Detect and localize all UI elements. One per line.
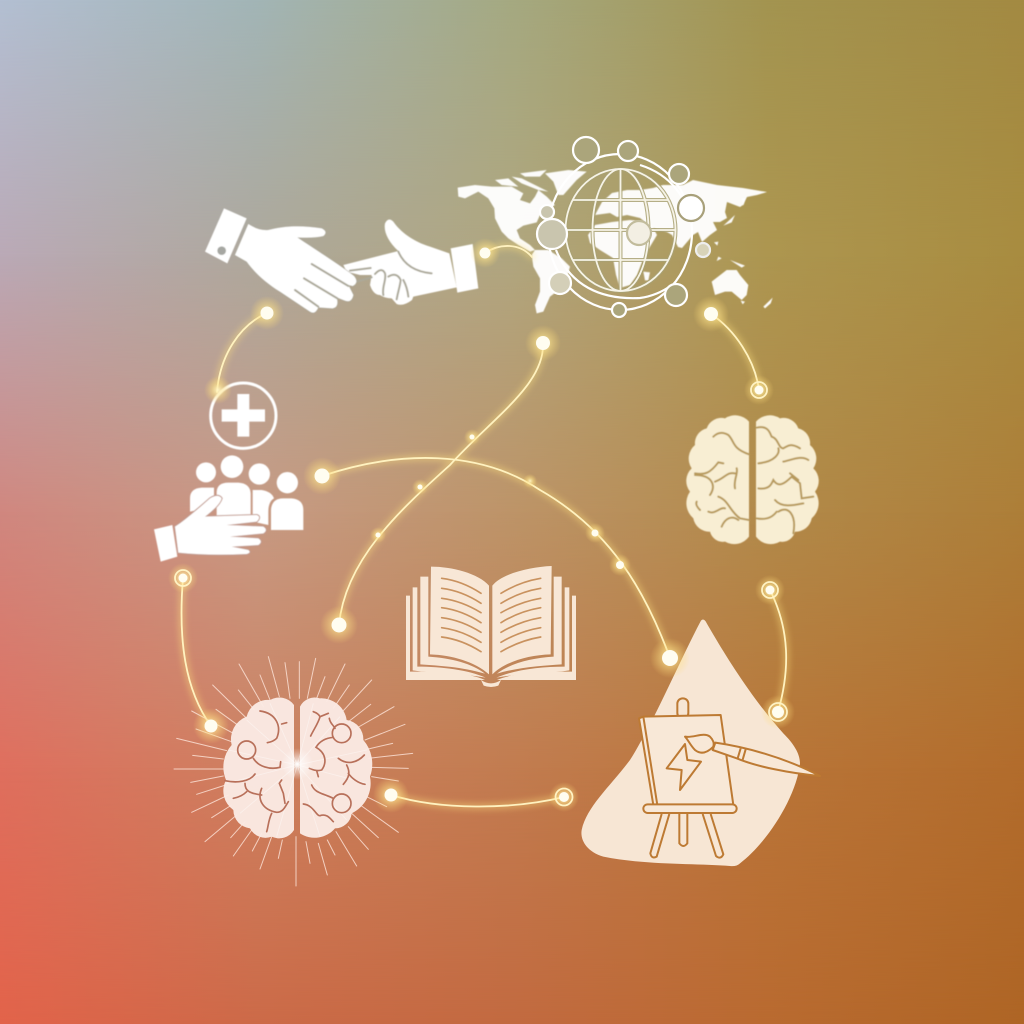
back pages left [406, 596, 485, 680]
icon: world map with globe [458, 137, 773, 317]
brain lobes [223, 698, 294, 838]
back pages right [497, 596, 576, 680]
brain lobes [686, 415, 749, 544]
continents [458, 170, 773, 313]
easel shelf [643, 804, 737, 813]
brain folds [225, 711, 365, 832]
book spine tab [481, 680, 501, 687]
small path sparkles [370, 429, 631, 576]
americas [458, 170, 587, 313]
brain folds [695, 427, 813, 533]
orbit rings [548, 154, 692, 310]
left hand cuff [205, 208, 247, 263]
medical cross badge [211, 383, 276, 448]
globe outline and grid [566, 169, 676, 291]
cream drop shape [581, 619, 800, 866]
icon: medical cross and people with caring hand [154, 383, 303, 562]
inner light rays [227, 703, 367, 837]
radiating rays [174, 657, 413, 886]
central flare [281, 748, 313, 780]
easel post [677, 698, 688, 718]
canvas [639, 715, 733, 805]
solid nodes [193, 238, 729, 813]
icon: easel on cream drop [581, 619, 820, 866]
australia and islands [643, 198, 773, 308]
right hand with curled fingers [343, 220, 457, 305]
icon: brain top right [686, 415, 819, 544]
left page [430, 567, 489, 674]
glowing connector paths [181, 246, 786, 807]
group of people [190, 455, 303, 530]
right hand cuff [451, 244, 478, 293]
africa [588, 220, 657, 288]
icon: open book [406, 566, 576, 687]
easel legs [650, 814, 723, 858]
eurasia [595, 180, 767, 248]
lightning bolt [667, 744, 701, 790]
right page [492, 566, 552, 674]
icon: handshake [205, 208, 478, 313]
glow nodes [168, 238, 795, 813]
paintbrush [685, 735, 820, 776]
ringed nodes [168, 375, 795, 812]
text lines [442, 578, 541, 652]
left hand [235, 224, 356, 313]
icon: radiant brain [174, 657, 413, 886]
network nodes [537, 137, 710, 317]
cuff button [217, 246, 226, 255]
caring hand [154, 496, 266, 562]
